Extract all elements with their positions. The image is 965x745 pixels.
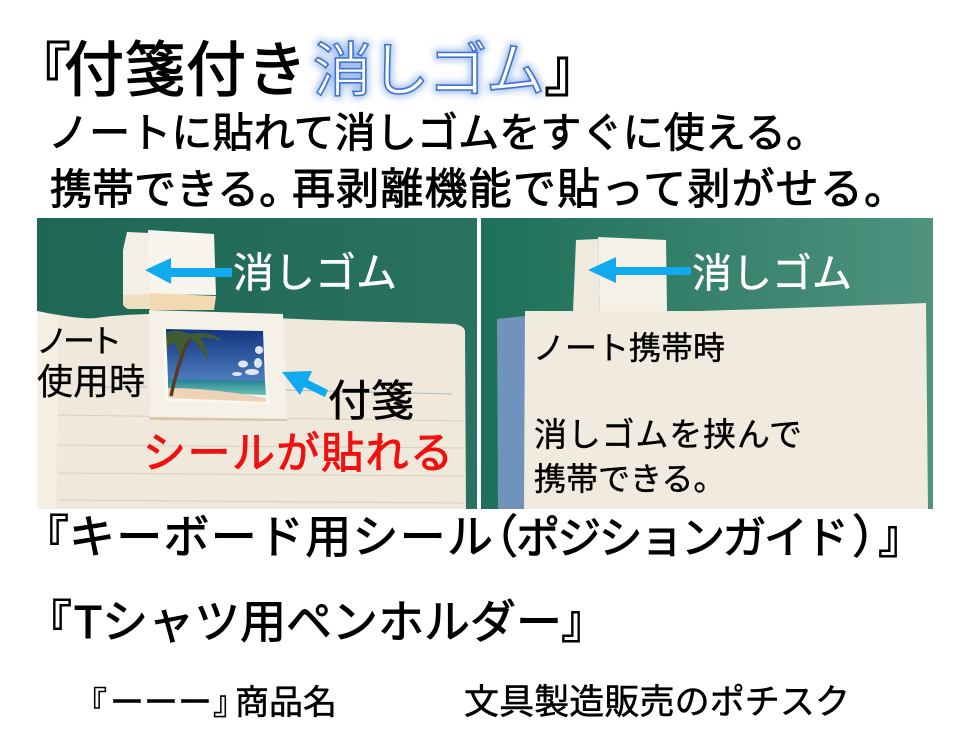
label: sticky note: 付箋 bbox=[328, 378, 414, 426]
heading: keyboard sticker: （ bbox=[472, 511, 518, 563]
title: 『 bbox=[12, 38, 71, 104]
description text: ノートに貼れて消しゴムをすぐに使える。 bbox=[48, 110, 827, 156]
heading: keyboard sticker: キーボード用シール bbox=[69, 511, 493, 563]
description text: 携帯できる。 bbox=[50, 166, 301, 213]
footer: product name: 』 bbox=[213, 685, 245, 721]
title: 』 bbox=[544, 38, 603, 104]
heading: keyboard sticker: 』 bbox=[878, 511, 924, 563]
panel: note in use photo bbox=[36, 218, 477, 509]
heading: keyboard sticker: ） bbox=[852, 511, 898, 563]
footer: product name: 商品名 bbox=[235, 684, 337, 722]
title: 消しゴム bbox=[313, 38, 545, 104]
green board background bbox=[481, 218, 933, 509]
sticky note bbox=[149, 310, 287, 421]
label: note in use: ノート bbox=[36, 323, 122, 359]
heading: keyboard sticker: 『 bbox=[23, 511, 69, 563]
label: explanation bbox=[534, 416, 802, 497]
footer: product name: 『 bbox=[75, 685, 107, 721]
label: eraser: 消しゴム bbox=[233, 250, 397, 296]
label: explanation: 携帯できる。 bbox=[534, 461, 725, 497]
panel: note in use photo: 使用時 bbox=[37, 361, 145, 402]
description text: 再剥離機能で貼って剥がせる。 bbox=[292, 166, 907, 214]
label: explanation: 消しゴムを挟んで bbox=[534, 416, 802, 453]
notebook cover bbox=[524, 303, 928, 509]
heading: T-shirt pen holder: Tシャツ用ペンホルダー bbox=[74, 596, 562, 648]
heading: keyboard sticker bbox=[23, 511, 924, 563]
heading: T-shirt pen holder: 』 bbox=[561, 596, 607, 648]
label: eraser: 消しゴム bbox=[692, 252, 852, 296]
arrow: to eraser bbox=[588, 257, 691, 283]
label: stickers can be applied: シールが貼れる bbox=[143, 430, 453, 478]
notebook edge bbox=[497, 316, 525, 509]
eraser behind note bbox=[573, 237, 667, 312]
eraser bbox=[123, 230, 216, 310]
label: carrying: ノート携帯時 bbox=[533, 330, 725, 366]
panel: note carrying photo bbox=[481, 218, 933, 509]
notebook page bbox=[37, 311, 466, 509]
green board background bbox=[37, 218, 477, 509]
title: 付箋付き bbox=[64, 37, 307, 104]
arrow: to sticky note bbox=[282, 371, 328, 397]
title bbox=[12, 37, 603, 104]
arrow: to eraser bbox=[145, 258, 232, 284]
heading: keyboard sticker: ポジションガイド bbox=[516, 514, 849, 563]
footer: product name: ーーー bbox=[110, 684, 212, 722]
description text bbox=[48, 110, 907, 214]
footer: company: 文具製造販売のポチスク bbox=[464, 683, 850, 722]
beach photo sticker bbox=[163, 328, 269, 404]
footer: product name bbox=[75, 684, 337, 722]
heading: T-shirt pen holder: 『 bbox=[26, 596, 72, 648]
title: 消しゴム bbox=[313, 38, 545, 104]
